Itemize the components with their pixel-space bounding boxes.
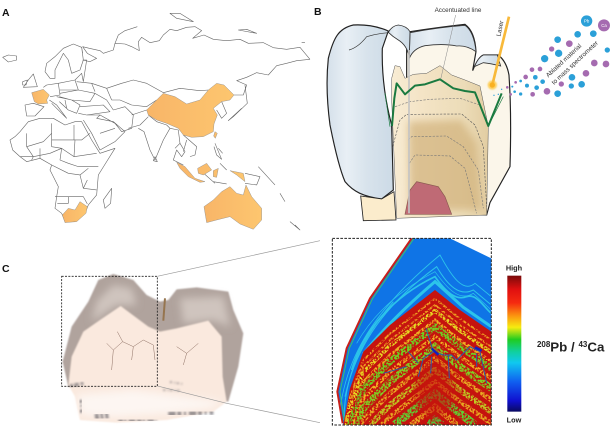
panel B: tooth diagram [327,7,610,221]
left enamel section [327,25,393,199]
Taiwan [214,132,217,138]
Iberia [25,103,44,116]
India and South East Asia [138,115,197,165]
root stub [361,192,396,221]
ratio label: Pb / [550,339,578,354]
Russia north coast [83,27,310,62]
Africa outline [10,118,115,222]
ablated material label: to mass spectrometer [551,40,600,86]
dentine [68,306,227,423]
redder central zone [415,362,455,418]
dashed zoom frame [332,238,491,425]
upper enamel [388,25,501,67]
shaded pulp area [408,120,482,210]
vertical section edge [406,50,411,213]
fissure [163,298,165,321]
tooth outer enamel [63,274,243,402]
yellow green growth bands [345,299,491,425]
China [147,83,234,137]
panel B label: B [314,6,322,18]
panel C: tooth photograph [62,241,320,423]
Korea, Japan and Philippines [214,85,247,159]
pulp [405,182,452,214]
red rim [337,238,412,423]
dark edge staining [70,382,213,421]
blue enamel layer [337,238,491,425]
dashed selection box [62,276,157,386]
accentuated line green [392,79,502,126]
laser beam: Laser [495,20,506,37]
Ca atom: Ca [601,23,607,28]
red dentine layer [343,290,491,425]
color scale bar [506,264,523,424]
Scandinavia [45,44,83,78]
panel A label: A [2,7,10,19]
enamel inner line [349,33,388,50]
cracks [107,332,198,370]
Arctic and Pacific islands [170,13,305,230]
blue cracks [383,328,487,383]
ratio label: Ca [587,339,605,354]
Africa country borders [20,123,98,204]
France [32,89,49,104]
panel A: world map [3,13,310,230]
whitened bottom edge [77,390,223,417]
accentuated line label: Accentuated line [435,7,482,14]
dentin section [392,66,488,218]
panel C label: C [2,263,10,275]
Russia east and south border [107,59,310,95]
accentuated line label [435,7,482,79]
Australia [204,185,262,229]
right crown body [407,24,511,215]
map outlines: Eurasia and Africa borders [3,13,310,230]
Iceland [3,55,17,62]
blue layer cyan bands [340,255,491,420]
zoom connector lines [157,241,320,423]
Italy [49,100,67,118]
ratio label: 43 [578,340,588,349]
panel C: element map inset [332,238,605,425]
Indonesia islands [177,162,245,182]
ablated material label: Ablated material [545,43,583,79]
color scale bar: Low [507,415,522,424]
color scale bar: High [506,264,523,273]
Middle East and Central Asia borders [83,88,157,150]
Madagascar [103,188,112,208]
ratio label: 208 [537,340,551,349]
highlighted countries [32,83,262,229]
Europe country borders [43,60,113,115]
ablated particles [493,15,610,97]
dashed growth lines [393,98,487,213]
UK and Ireland [23,74,37,87]
laser beam [488,17,509,90]
Pb atom: Pb [584,19,590,24]
lighter enamel highlights [92,285,230,327]
South Africa [62,202,87,223]
